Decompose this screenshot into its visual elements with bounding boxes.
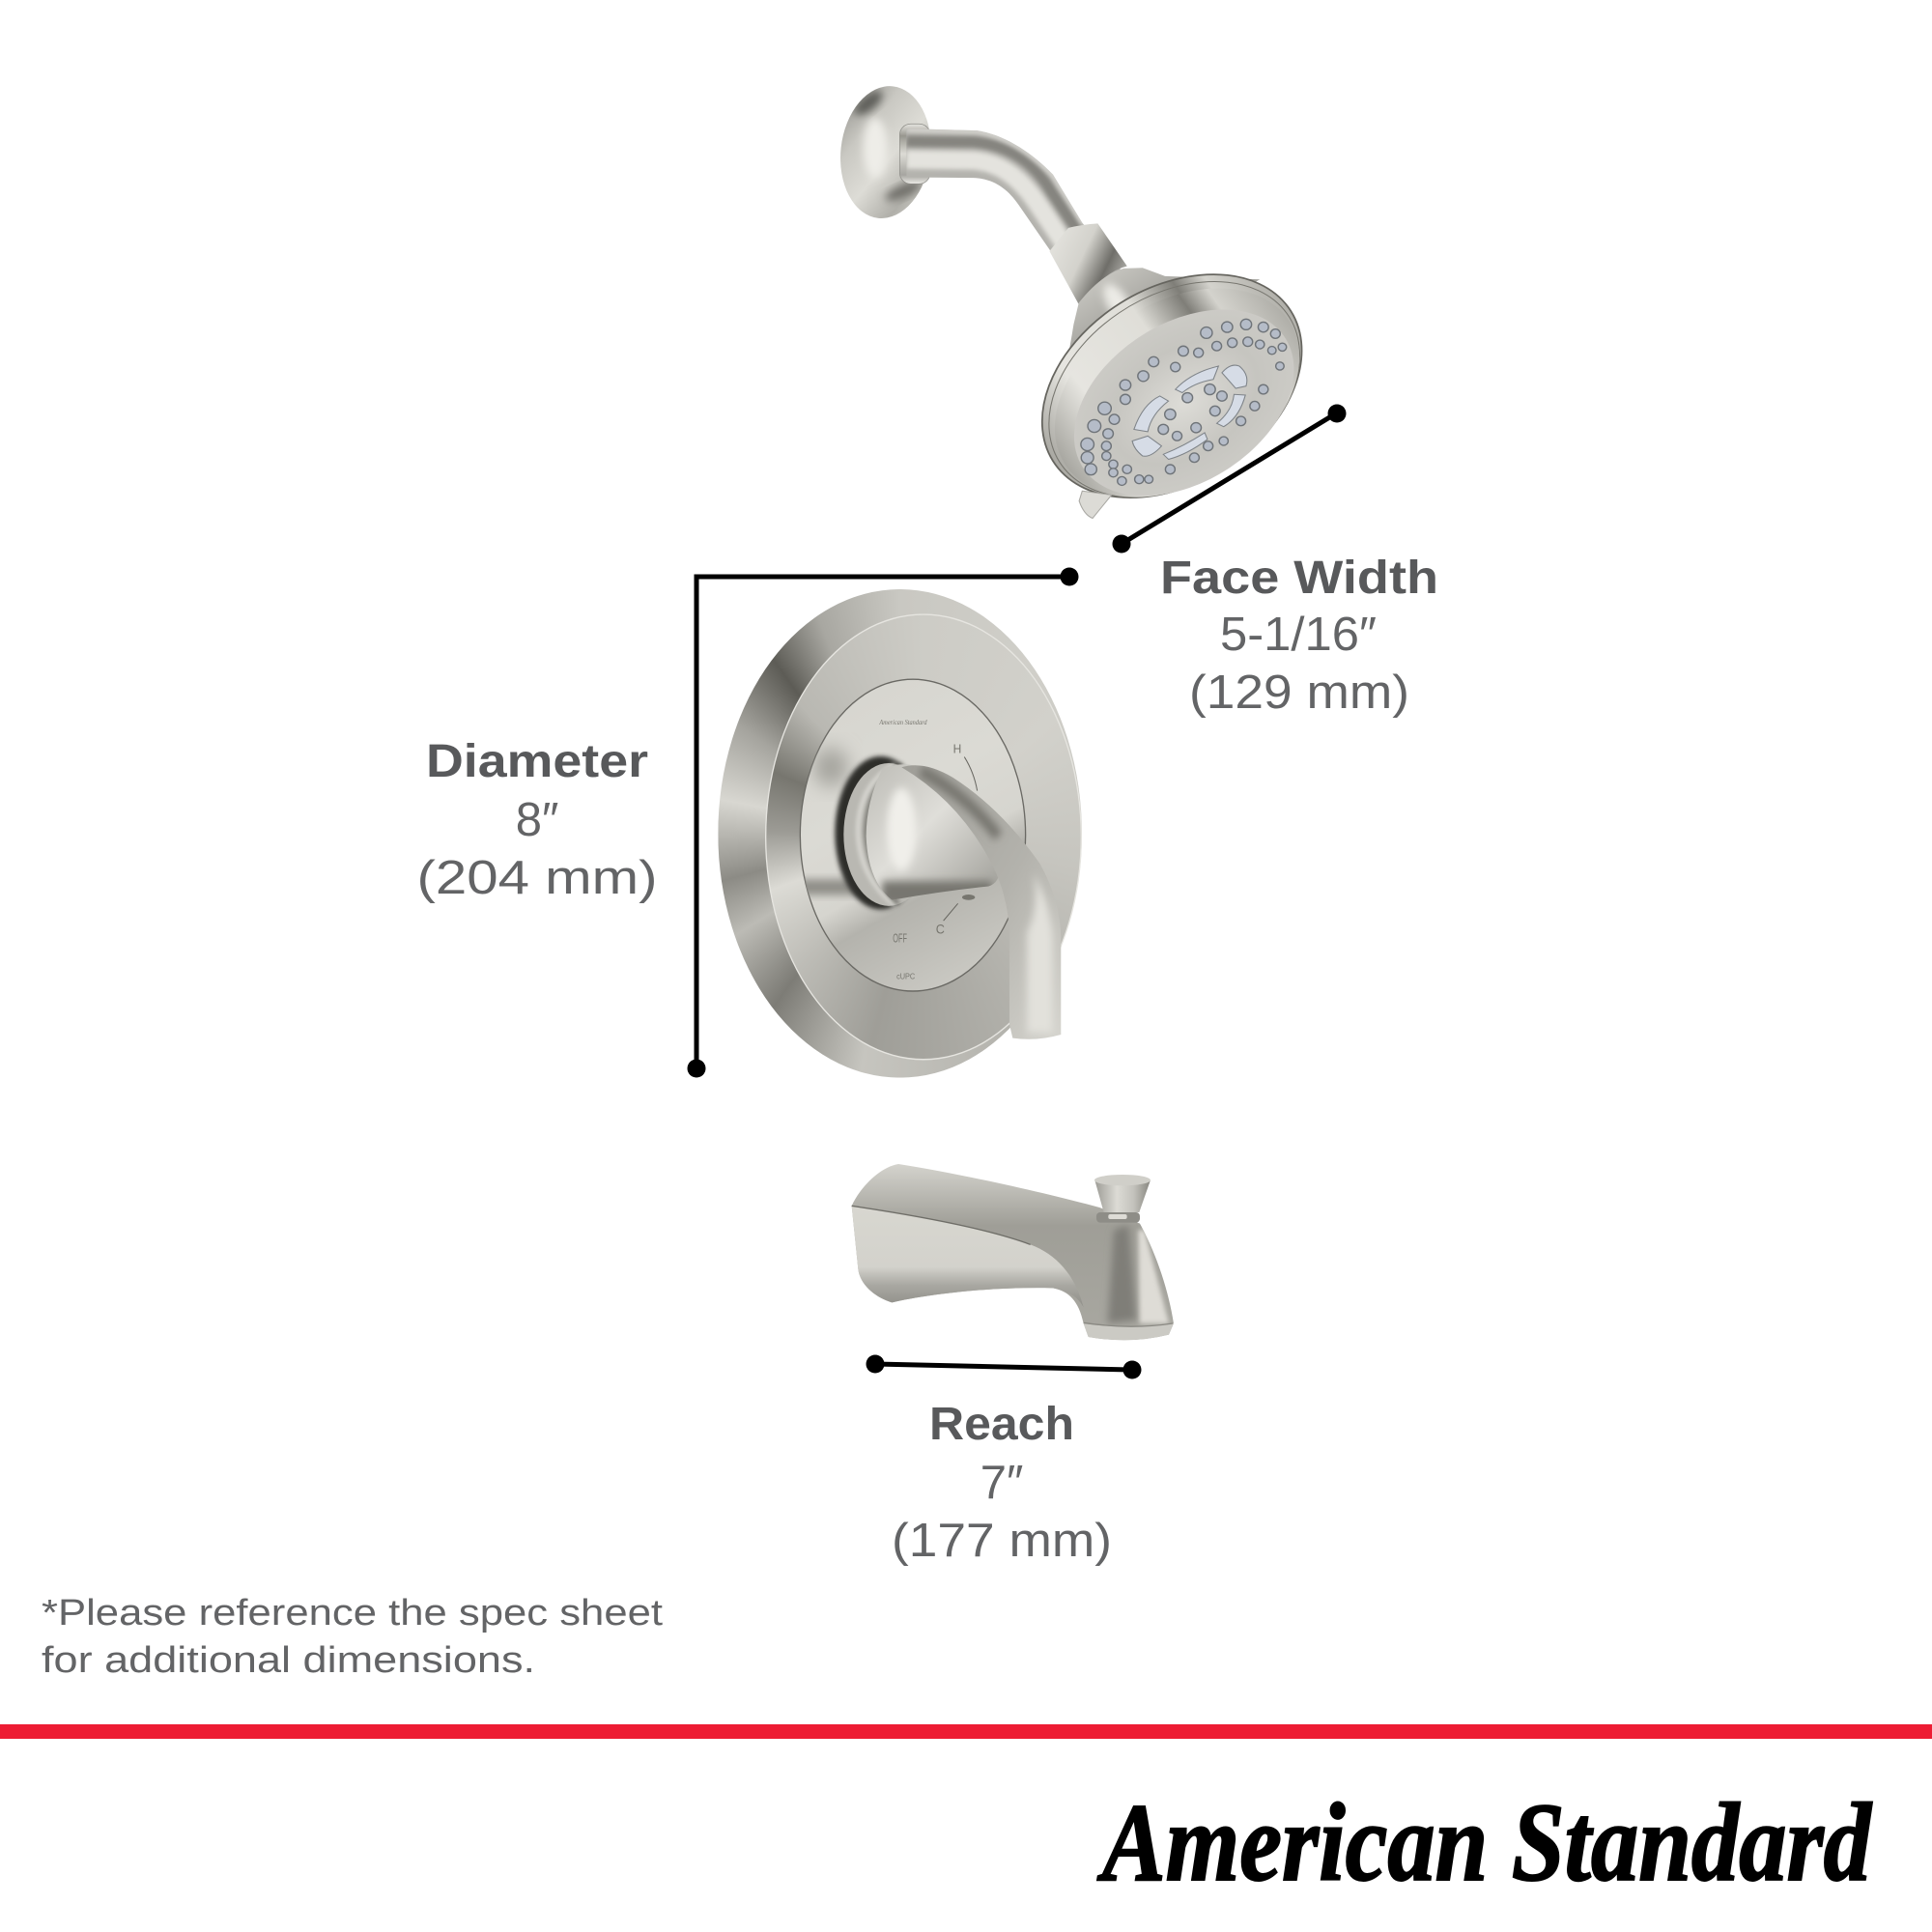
product: valve trim plate and handle — [718, 589, 1082, 1078]
product: shower head and arm — [834, 82, 1346, 544]
hub shadow — [835, 756, 926, 909]
nozzle shading — [1082, 1225, 1174, 1346]
handle lever — [901, 765, 1061, 1039]
label: face width: (129 mm) — [1189, 667, 1409, 719]
spout body — [852, 1164, 1174, 1346]
dial markings: cUPC — [896, 972, 916, 981]
selector lever — [1079, 491, 1112, 519]
product: tub spout — [852, 1164, 1174, 1346]
handle body — [867, 764, 1000, 905]
label: diameter — [417, 736, 657, 904]
label: face width — [1160, 553, 1438, 719]
label: face width: Face Width — [1160, 553, 1438, 604]
footnote — [42, 1593, 664, 1681]
label: diameter: Diameter — [426, 736, 648, 787]
label: diameter: (204 mm) — [417, 852, 657, 904]
inner dial — [800, 679, 1026, 991]
label: reach: 7″ — [980, 1457, 1023, 1509]
head face — [1037, 271, 1330, 534]
head back cone — [1069, 268, 1260, 348]
dial markings: H — [953, 742, 961, 755]
facet ridge — [852, 1206, 1031, 1244]
label: face width: 5-1/16″ — [1220, 609, 1377, 661]
rim inner — [1014, 245, 1341, 540]
dimension line: face width — [1113, 404, 1347, 553]
diverter knob — [1094, 1175, 1151, 1223]
lower facet — [852, 1206, 1084, 1307]
arm collar at flange — [899, 124, 930, 184]
dimension line: reach — [866, 1354, 1142, 1379]
dial markings: OFF — [893, 931, 907, 946]
spray nozzles — [1081, 319, 1287, 485]
hub ring — [843, 763, 934, 906]
dimension line: diameter — [688, 568, 1078, 1078]
arm — [906, 129, 1121, 278]
dial markings: C — [936, 922, 945, 937]
swivel collar — [1049, 223, 1127, 304]
label: reach: Reach — [929, 1399, 1074, 1450]
label: diameter: 8″ — [516, 794, 558, 846]
head rim — [998, 228, 1346, 544]
label: reach: (177 mm) — [892, 1515, 1112, 1567]
dial markings: American Standard — [878, 720, 927, 726]
footnote: for additional dimensions. — [42, 1640, 535, 1681]
spray pads — [1132, 365, 1247, 459]
front plate — [765, 613, 1082, 1060]
footnote: *Please reference the spec sheet — [42, 1593, 664, 1634]
rim step line — [1007, 237, 1342, 542]
wall flange — [840, 86, 929, 218]
handle set screw — [962, 895, 975, 900]
red divider bar — [0, 1724, 1932, 1739]
outer escutcheon — [718, 589, 1082, 1078]
label: reach — [892, 1399, 1112, 1567]
dial markings — [878, 720, 978, 981]
